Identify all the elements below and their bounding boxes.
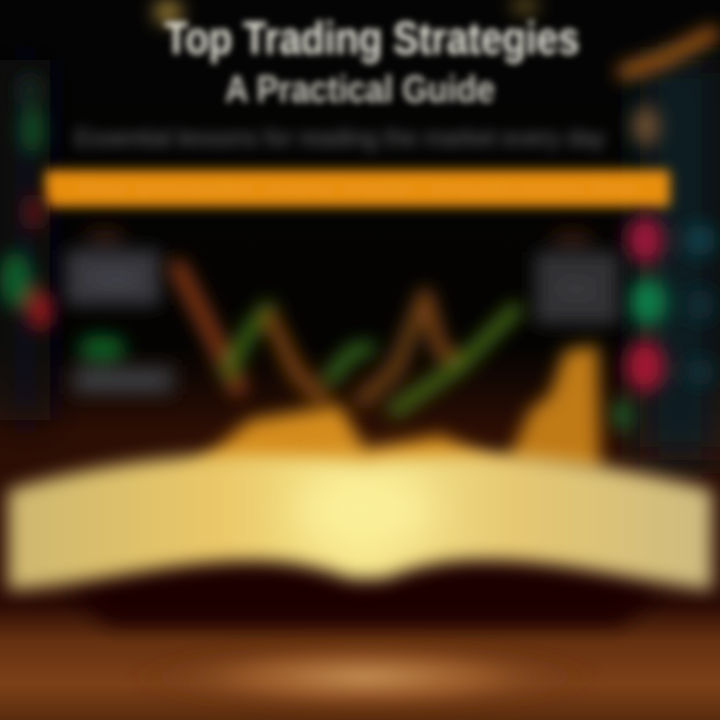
title: Top Trading Strategies — [164, 12, 580, 64]
side panel: right dark column — [640, 60, 720, 460]
title — [164, 12, 580, 111]
left side candles — [0, 74, 53, 330]
icon: top right arrow stroke — [625, 34, 712, 72]
illustration: open book — [8, 455, 712, 625]
right side indicators — [612, 106, 716, 431]
panel: right info card — [535, 231, 619, 324]
subtitle: Essential lessons for reading the market every day — [75, 125, 605, 152]
title: A Practical Guide — [225, 69, 495, 111]
panel: left info card: Trend — [92, 271, 134, 288]
orange banner: Key principles every trader should learn first — [78, 178, 639, 200]
panel: left info card — [66, 229, 160, 305]
orange banner — [45, 170, 670, 207]
panel: left lower label — [72, 335, 174, 394]
chart: orange rising bars — [505, 345, 600, 475]
table surface glow — [125, 639, 605, 715]
book pages — [8, 455, 712, 590]
glow above book — [180, 405, 540, 480]
book cover shadow — [70, 556, 660, 625]
panel: left lower label: Momentum — [85, 373, 161, 390]
chart: candlestick zigzag lines — [178, 268, 515, 410]
side panel: left dark column — [0, 60, 50, 420]
gold corner glows — [154, 0, 539, 24]
panel: right info card: Risk — [561, 281, 594, 298]
book centre glow — [295, 472, 435, 548]
